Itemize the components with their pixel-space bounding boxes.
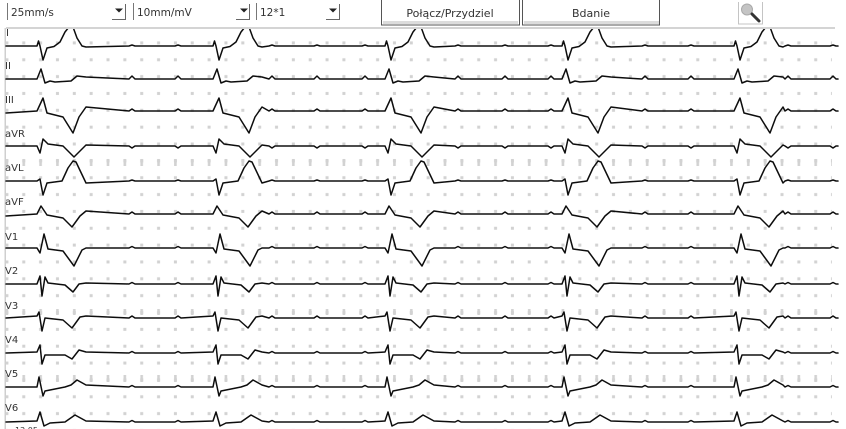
- dropdown: gain: 10mm/mV: [137, 7, 193, 19]
- trace: lead III: [6, 98, 838, 133]
- dropdown: gain: [134, 3, 250, 20]
- button: connect/assign: Połącz/Przydziel: [406, 7, 494, 20]
- lead labels: aVL: [5, 163, 24, 174]
- toolbar: [0, 0, 846, 29]
- lead labels: V2: [5, 266, 18, 277]
- trace: lead V2: [6, 276, 838, 296]
- lead labels: V6: [5, 403, 18, 414]
- lead labels: aVF: [5, 197, 24, 208]
- lead labels: I: [6, 28, 9, 39]
- trace: lead V1: [6, 234, 838, 266]
- trace: lead V4: [6, 345, 838, 364]
- trace: lead V3: [6, 312, 838, 331]
- button: examination: Bdanie: [572, 7, 610, 20]
- trace: lead aVF: [6, 206, 838, 227]
- button: connect/assign: [382, 0, 520, 25]
- lead labels: [5, 28, 38, 429]
- trace: lead aVR: [6, 139, 838, 157]
- dropdown: paper speed: [8, 3, 126, 20]
- dropdown: layout: 12*1: [260, 7, 285, 19]
- dropdown: paper speed: 25mm/s: [11, 7, 54, 19]
- lead labels: II: [5, 61, 11, 72]
- button: examination: [522, 0, 660, 25]
- lead labels: V1: [5, 232, 18, 243]
- icon: magnifier: [738, 2, 762, 24]
- lead labels: V5: [5, 369, 18, 380]
- lead labels: V4: [5, 335, 18, 346]
- trace: lead II: [6, 69, 838, 83]
- trace: lead aVL: [6, 161, 838, 195]
- lead labels: III: [5, 95, 14, 106]
- trace: lead V6: [6, 412, 838, 426]
- lead labels: aVR: [5, 129, 25, 140]
- trace: lead I: [6, 27, 838, 60]
- dropdown: layout: [256, 3, 340, 20]
- lead labels: V3: [5, 301, 18, 312]
- trace: lead V5: [6, 377, 838, 396]
